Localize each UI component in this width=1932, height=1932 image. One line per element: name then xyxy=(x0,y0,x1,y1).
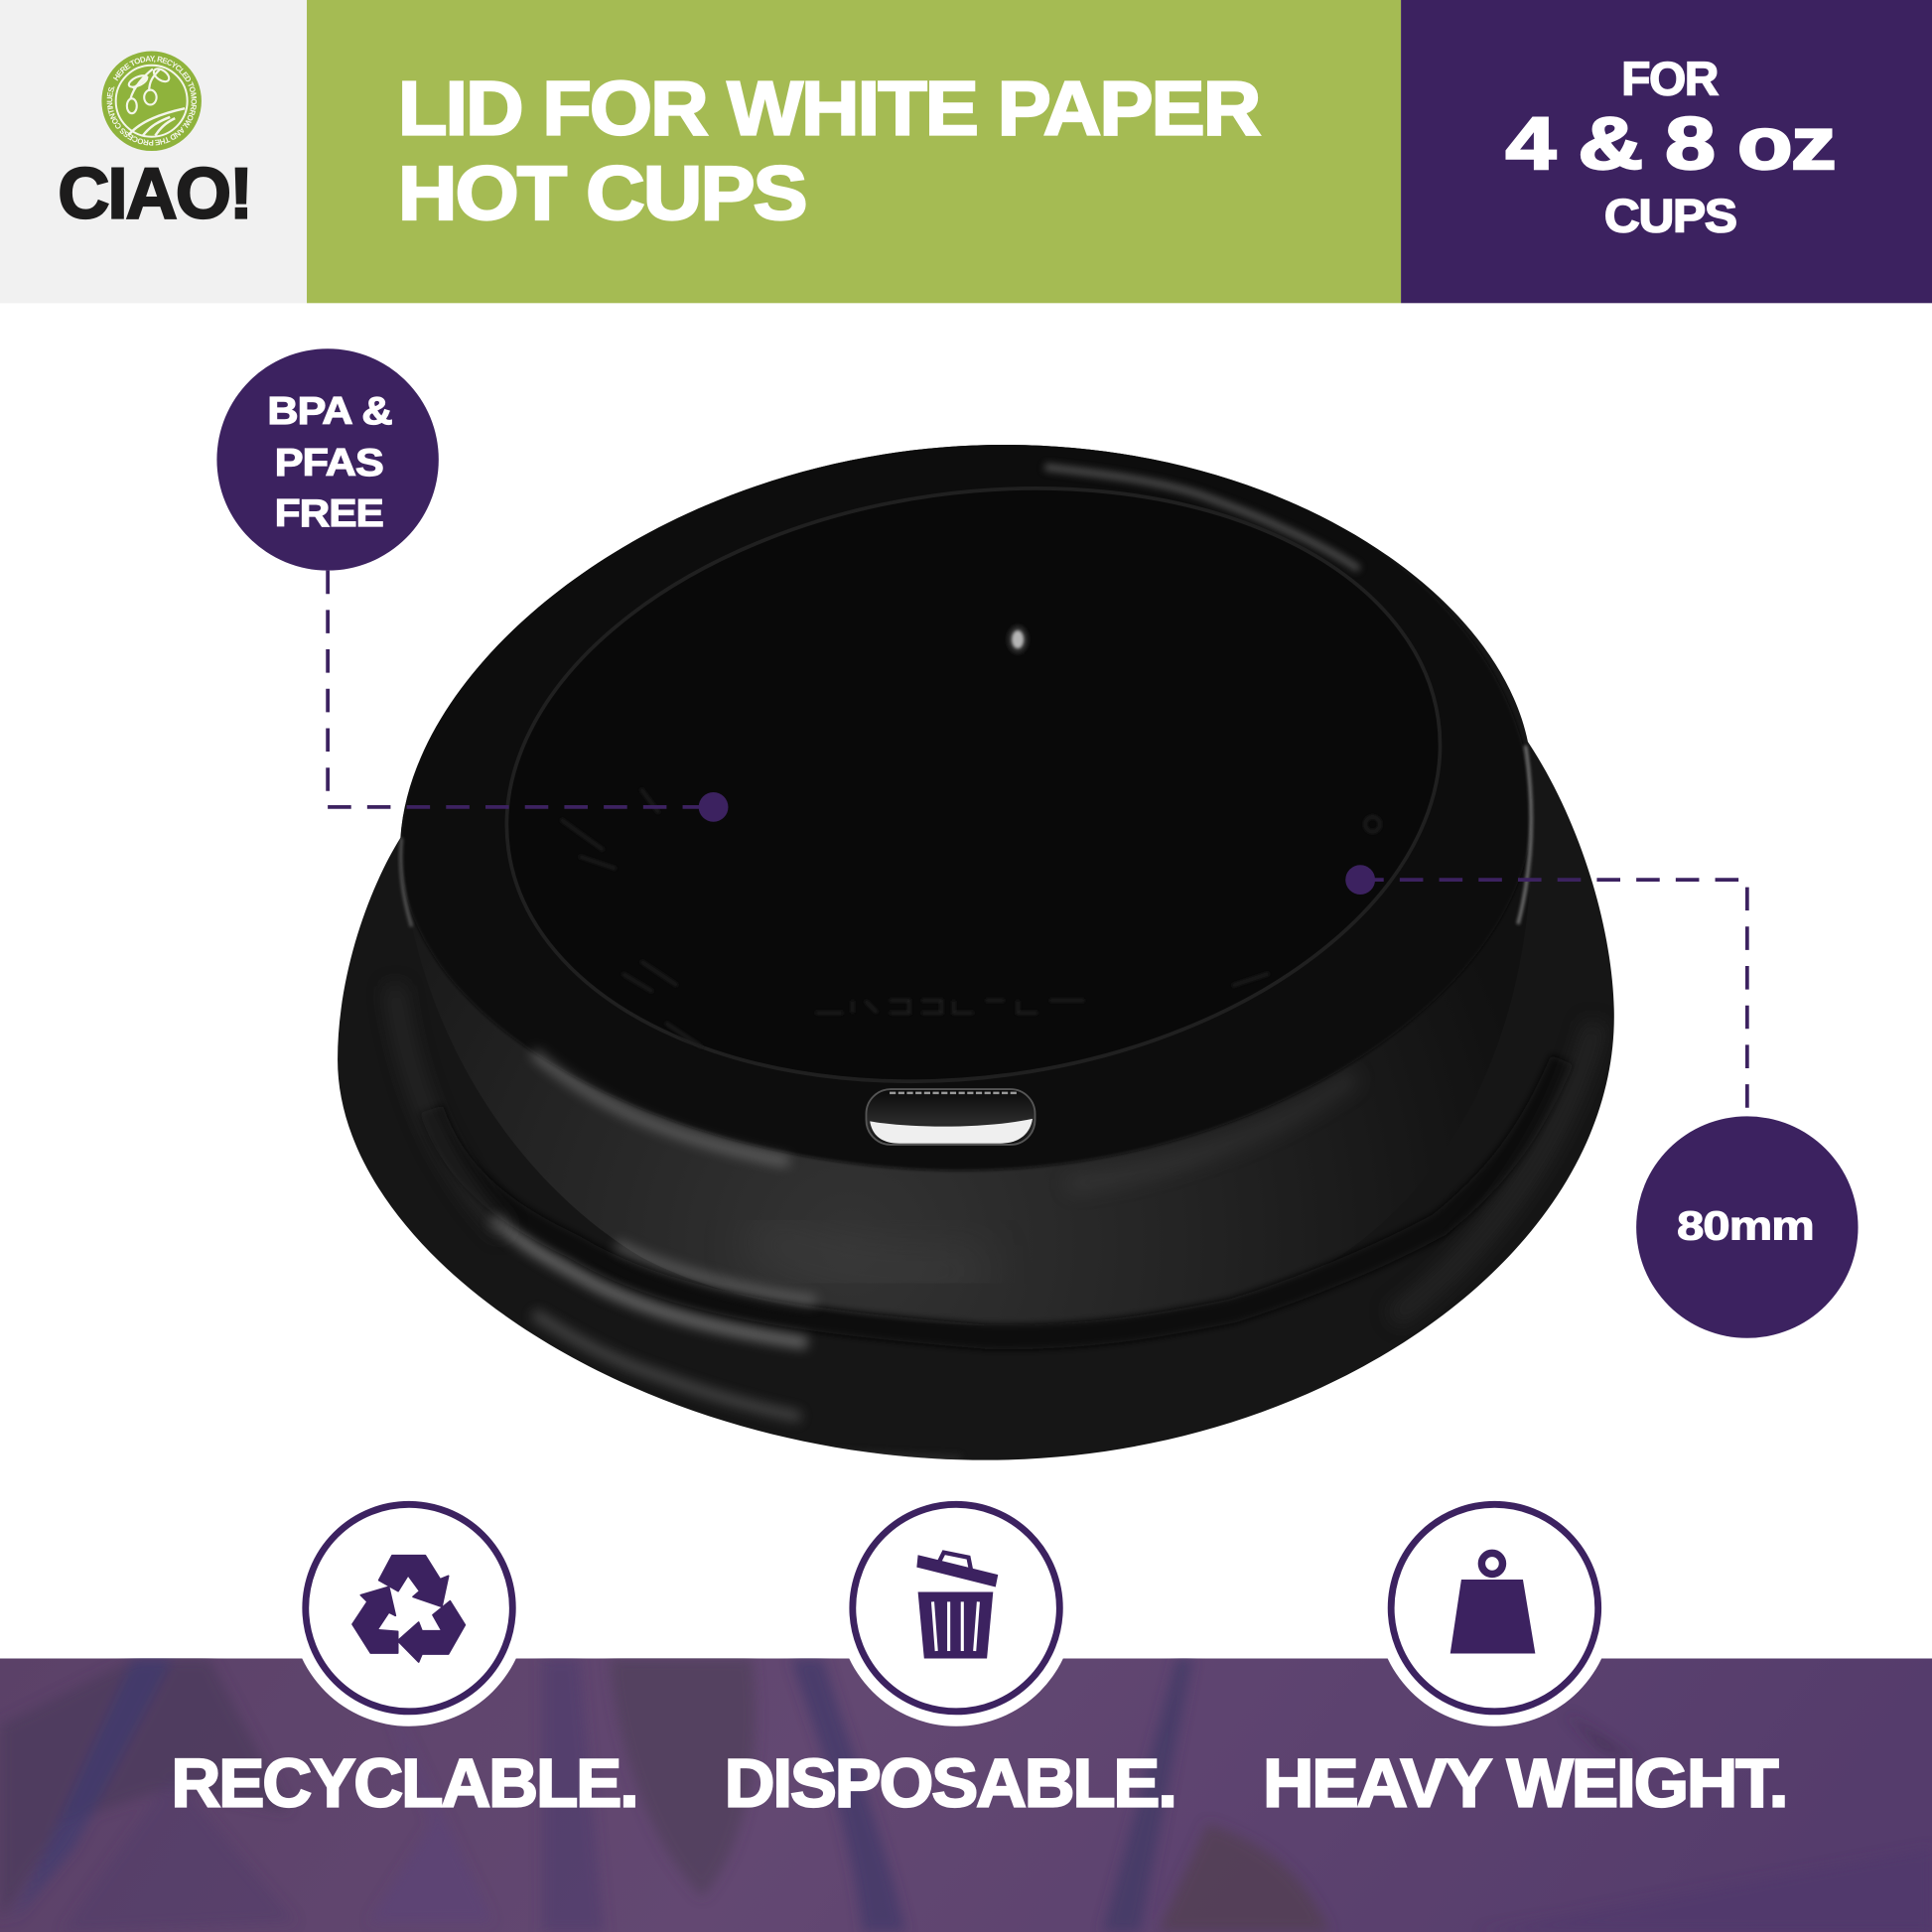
icon ring xyxy=(838,1489,1074,1726)
size text: FOR xyxy=(1621,53,1719,105)
badge text: PFAS xyxy=(275,442,383,484)
icon ring xyxy=(291,1489,527,1726)
embossed markings xyxy=(561,788,1380,1047)
title: HOT CUPS xyxy=(398,151,806,236)
lid shoulder highlight xyxy=(533,1052,788,1162)
lid groove xyxy=(431,1059,1563,1337)
feature: disposable xyxy=(725,1489,1175,1821)
lid side wall xyxy=(457,1011,1291,1325)
lid recessed centre xyxy=(468,430,1479,1140)
icon: recycle arrows xyxy=(352,1556,465,1662)
leader dot xyxy=(699,792,728,822)
lid top dome xyxy=(400,431,1532,1171)
logo wordmark: CIAO! xyxy=(58,155,251,234)
title: LID FOR WHITE PAPER xyxy=(398,66,1260,151)
lid brim highlights xyxy=(492,1218,807,1343)
header: title panel xyxy=(307,0,1401,303)
badge text xyxy=(267,390,392,535)
feature: recyclable xyxy=(172,1489,637,1821)
badge text: BPA & xyxy=(267,390,392,433)
header: size panel xyxy=(1401,0,1932,303)
leader line xyxy=(328,571,715,807)
leader line xyxy=(1360,880,1747,1118)
label: DISPOSABLE. xyxy=(725,1745,1175,1821)
sip vent hole xyxy=(1007,624,1029,654)
lid flange silhouette xyxy=(338,445,1614,1460)
footer band xyxy=(0,1658,1932,1932)
icon: weight xyxy=(1450,1553,1535,1654)
label: RECYCLABLE. xyxy=(172,1745,637,1821)
size text: 4 & 8 oz xyxy=(1506,102,1835,185)
sip slot xyxy=(866,1089,1035,1145)
badge text: FREE xyxy=(275,492,383,535)
badge xyxy=(216,348,439,571)
title xyxy=(398,66,1260,236)
size text xyxy=(1506,53,1835,241)
badge text: 80mm xyxy=(1677,1203,1814,1249)
feature: heavy weight xyxy=(1263,1489,1787,1821)
leader dot xyxy=(1345,865,1375,895)
size text: CUPS xyxy=(1604,189,1736,241)
label: HEAVY WEIGHT. xyxy=(1263,1745,1787,1821)
icon ring xyxy=(1376,1489,1613,1726)
lid rim highlights xyxy=(1044,467,1359,569)
header: logo panel xyxy=(0,0,307,304)
icon: recycling olive badge: HERE TODAY, RECYCLED TOMORROW. AND THE PROCESS CONTINUES. xyxy=(107,56,197,146)
product photo: black lid xyxy=(338,430,1614,1460)
callout: 80mm xyxy=(1345,865,1859,1338)
lid shading xyxy=(394,431,1595,1458)
icon: trash can xyxy=(916,1553,998,1658)
badge xyxy=(1636,1116,1859,1338)
callout: BPA and PFAS free xyxy=(216,348,728,822)
